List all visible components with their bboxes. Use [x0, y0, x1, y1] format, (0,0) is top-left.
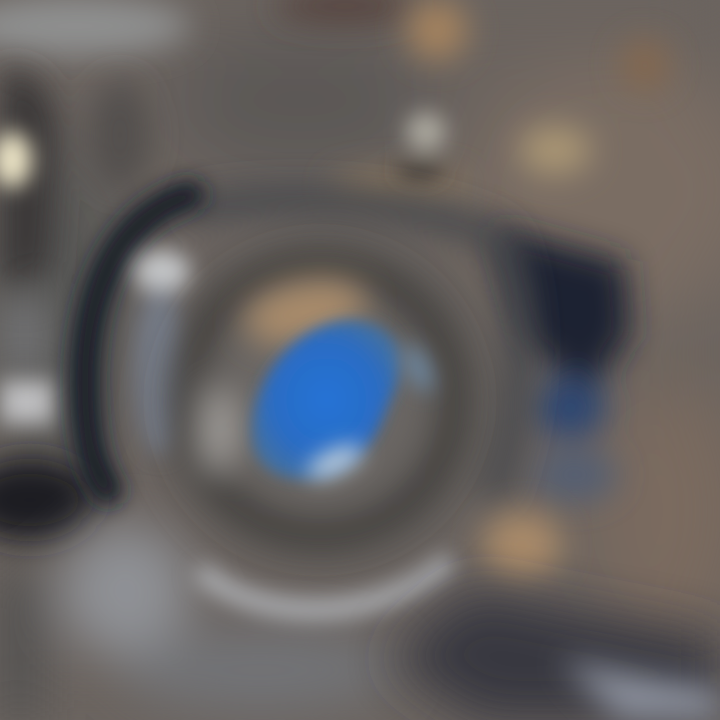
lens outer ring [150, 200, 520, 575]
handle highlight [560, 660, 720, 720]
lens inner ring [185, 265, 455, 535]
tan reflection above blue [238, 270, 372, 354]
blue centre of the lens [252, 320, 401, 479]
small white dot [396, 112, 446, 180]
dark curved frame arc [85, 195, 190, 490]
pale highlights on blue [303, 340, 438, 486]
bright lower rim of the lens [205, 565, 445, 609]
left bright spots [0, 132, 54, 424]
tan highlights top [330, 0, 669, 199]
bottom light grey area [0, 525, 400, 720]
tan blob lower right [482, 511, 562, 579]
top left light band [0, 0, 415, 56]
white glare by frame [134, 250, 190, 455]
left dark object [0, 70, 150, 542]
right dark navy block [490, 225, 630, 501]
magnifier handle [390, 590, 720, 720]
